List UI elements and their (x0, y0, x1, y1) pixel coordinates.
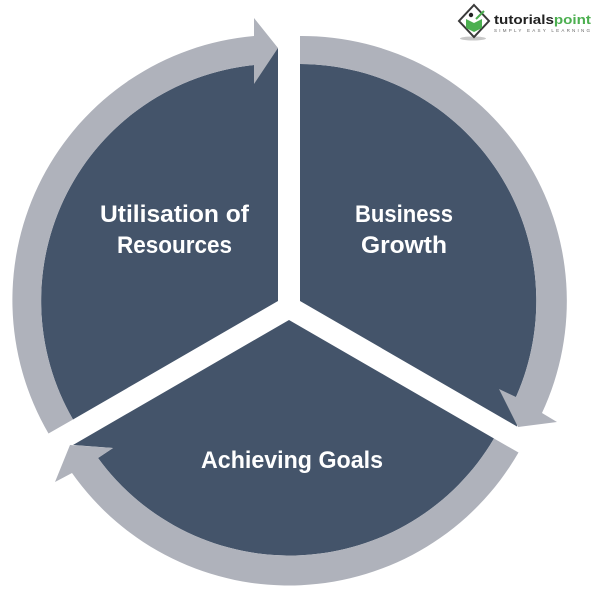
icon: logo diamond (459, 5, 489, 37)
arrow: left ring segment (12, 18, 278, 434)
icon: logo shadow (460, 36, 486, 40)
label: utilisation of resources: Resources (117, 232, 232, 259)
logo tagline: SIMPLY EASY LEARNING (494, 28, 590, 33)
label: utilisation of resources (100, 201, 250, 259)
label: business growth: Growth (361, 232, 447, 259)
logo: tutorialspoint (459, 5, 592, 40)
panel: achieving goals sector (55, 320, 518, 585)
label: business growth: Business (355, 201, 453, 228)
logo wordmark: tutorials point (494, 12, 592, 27)
label: business growth (355, 201, 453, 259)
label: achieving goals: Achieving Goals (201, 447, 383, 474)
panel: utilisation of resources sector (12, 18, 278, 434)
arrow: bottom ring segment (55, 438, 518, 585)
arrow: right ring segment (300, 36, 567, 427)
label: utilisation of resources: Utilisation of (100, 201, 250, 228)
panel: business growth sector (300, 36, 567, 427)
